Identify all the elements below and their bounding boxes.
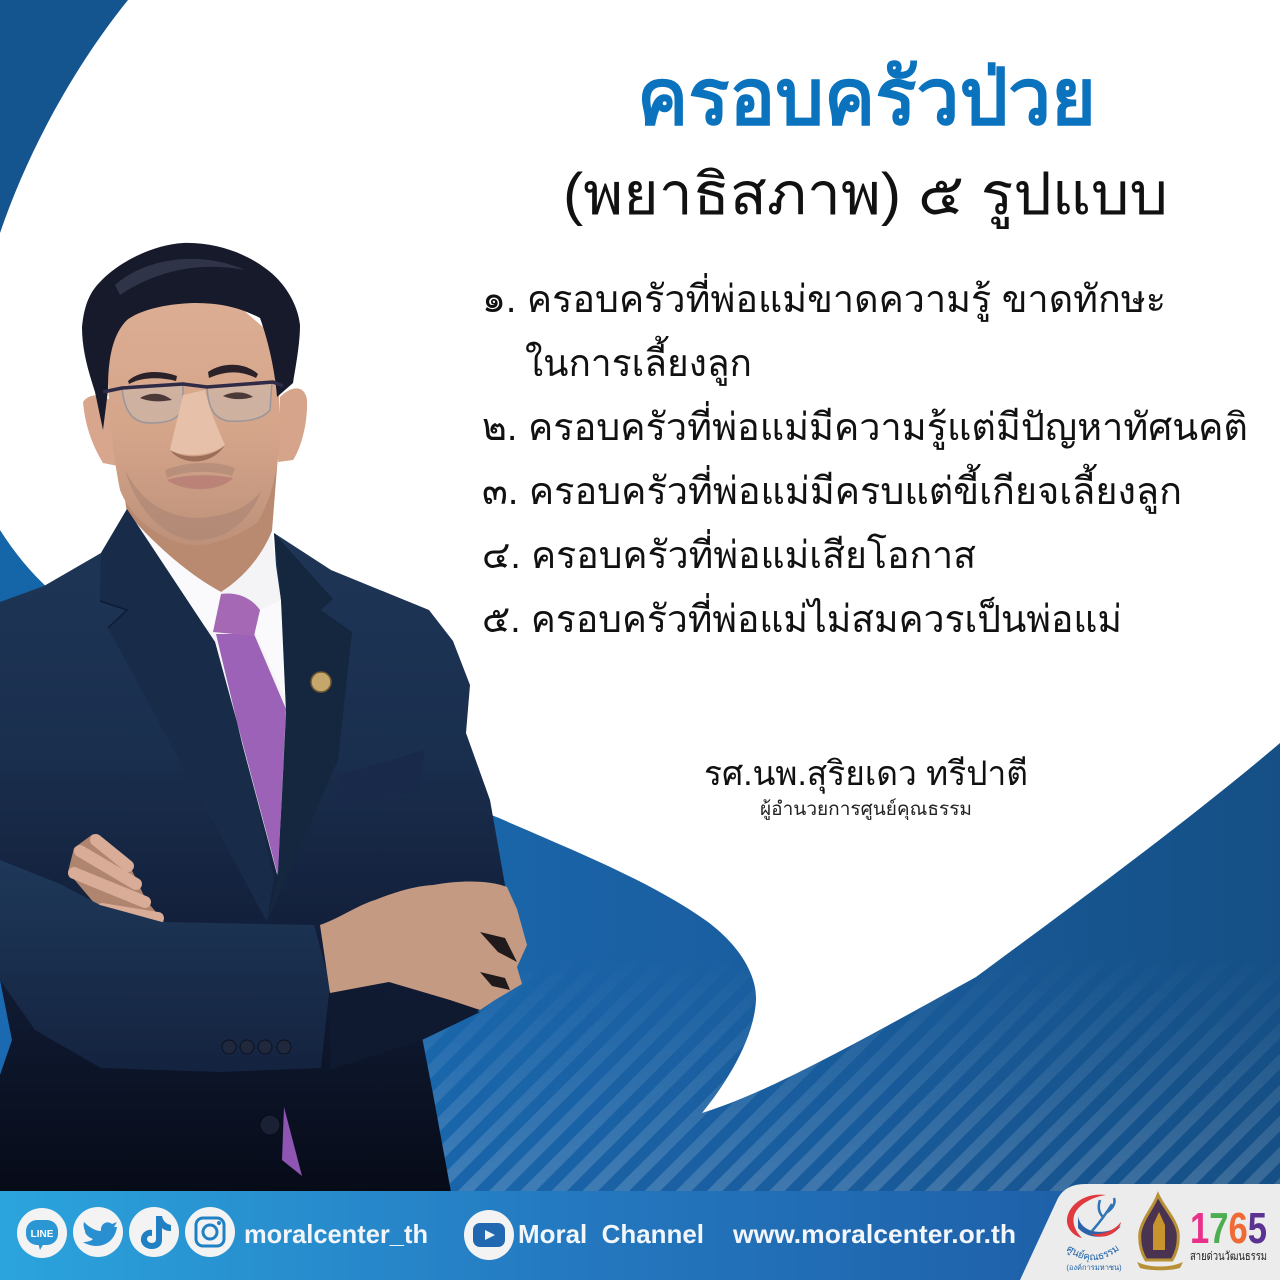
jacket button	[260, 1115, 280, 1135]
logo: moral center	[1066, 1194, 1122, 1272]
shirt	[127, 511, 288, 874]
sleeve shadow beneath hand	[330, 985, 480, 1070]
stubble shading	[125, 463, 262, 540]
left hand fingers	[74, 840, 158, 918]
background: diagonal stripes	[422, 1004, 1280, 1191]
item 4: ๔. ครอบครัวที่พ่อแม่เสียโอกาส	[482, 529, 976, 577]
item 5: ๕. ครอบครัวที่พ่อแม่ไม่สมควรเป็นพ่อแม่	[482, 593, 1122, 641]
logo: moral center: (องค์การมหาชน)	[1066, 1263, 1122, 1272]
lapel pin	[311, 672, 331, 692]
logo: ministry crest	[1137, 1195, 1183, 1270]
jacket body	[0, 509, 505, 1192]
logo: moral center: ศูนย์คุณธรรม	[1066, 1246, 1119, 1262]
icon: YouTube	[464, 1210, 514, 1260]
icon: LINE: LINE	[31, 1229, 54, 1240]
nostril shadow	[170, 445, 225, 461]
hair	[82, 243, 300, 430]
left lapel notch line	[100, 601, 127, 628]
hair highlight	[115, 259, 245, 295]
website: www.moralcenter.or.th	[732, 1219, 1016, 1249]
item 1: ๑. ครอบครัวที่พ่อแม่ขาดความรู้ ขาดทักษะ	[482, 273, 1166, 322]
neck	[122, 455, 278, 592]
left lapel	[100, 509, 274, 922]
channel name: Moral Channel	[518, 1219, 704, 1249]
logo: 1765 hotline: 1765	[1190, 1204, 1267, 1253]
icon: LINE	[17, 1208, 67, 1258]
eyes	[140, 392, 253, 401]
left edge sliver	[0, 980, 12, 1075]
author role: ผู้อำนวยการศูนย์คุณธรรม	[760, 798, 972, 821]
social handle: moralcenter_th	[244, 1219, 428, 1249]
icon: Instagram	[185, 1207, 235, 1257]
sleeve buttons	[222, 1040, 291, 1054]
title: ครอบครัวป่วย	[637, 53, 1096, 141]
glasses	[103, 382, 283, 423]
item 3: ๓. ครอบครัวที่พ่อแม่มีครบแต่ขี้เกียจเลี้ยงลูก	[482, 463, 1182, 514]
nose	[170, 390, 225, 455]
mouth	[167, 475, 233, 489]
face	[107, 290, 280, 545]
icon: TikTok	[129, 1207, 179, 1257]
right ear	[278, 388, 307, 462]
list of five family types	[482, 273, 1248, 641]
logo panel	[1020, 1184, 1280, 1280]
right hand	[320, 881, 527, 1010]
person portrait	[0, 243, 527, 1192]
eyebrows	[128, 365, 258, 384]
collar	[127, 513, 286, 700]
footer bar	[0, 1191, 1280, 1280]
left hand base	[68, 834, 164, 922]
breast pocket	[333, 750, 425, 808]
subtitle: (พยาธิสภาพ) ๕ รูปแบบ	[563, 162, 1168, 229]
necktie	[213, 594, 302, 1176]
item 2: ๒. ครอบครัวที่พ่อแม่มีความรู้แต่มีปัญหาทัศนคติ	[482, 401, 1248, 450]
knuckle shadow	[480, 932, 517, 990]
icon: Twitter	[73, 1207, 123, 1257]
author name: รศ.นพ.สุริยเดว ทรีปาตี	[704, 755, 1028, 794]
folded arm sleeve	[0, 860, 330, 1072]
background: lower blue area forming speech bubble tail	[300, 740, 1280, 1195]
right lapel	[267, 533, 352, 922]
item 1 continuation: ในการเลี้ยงลูก	[525, 335, 752, 386]
background: lower-left blue swoosh	[0, 530, 50, 610]
left ear	[83, 395, 118, 466]
background: top-left blue swoosh	[0, 0, 128, 233]
